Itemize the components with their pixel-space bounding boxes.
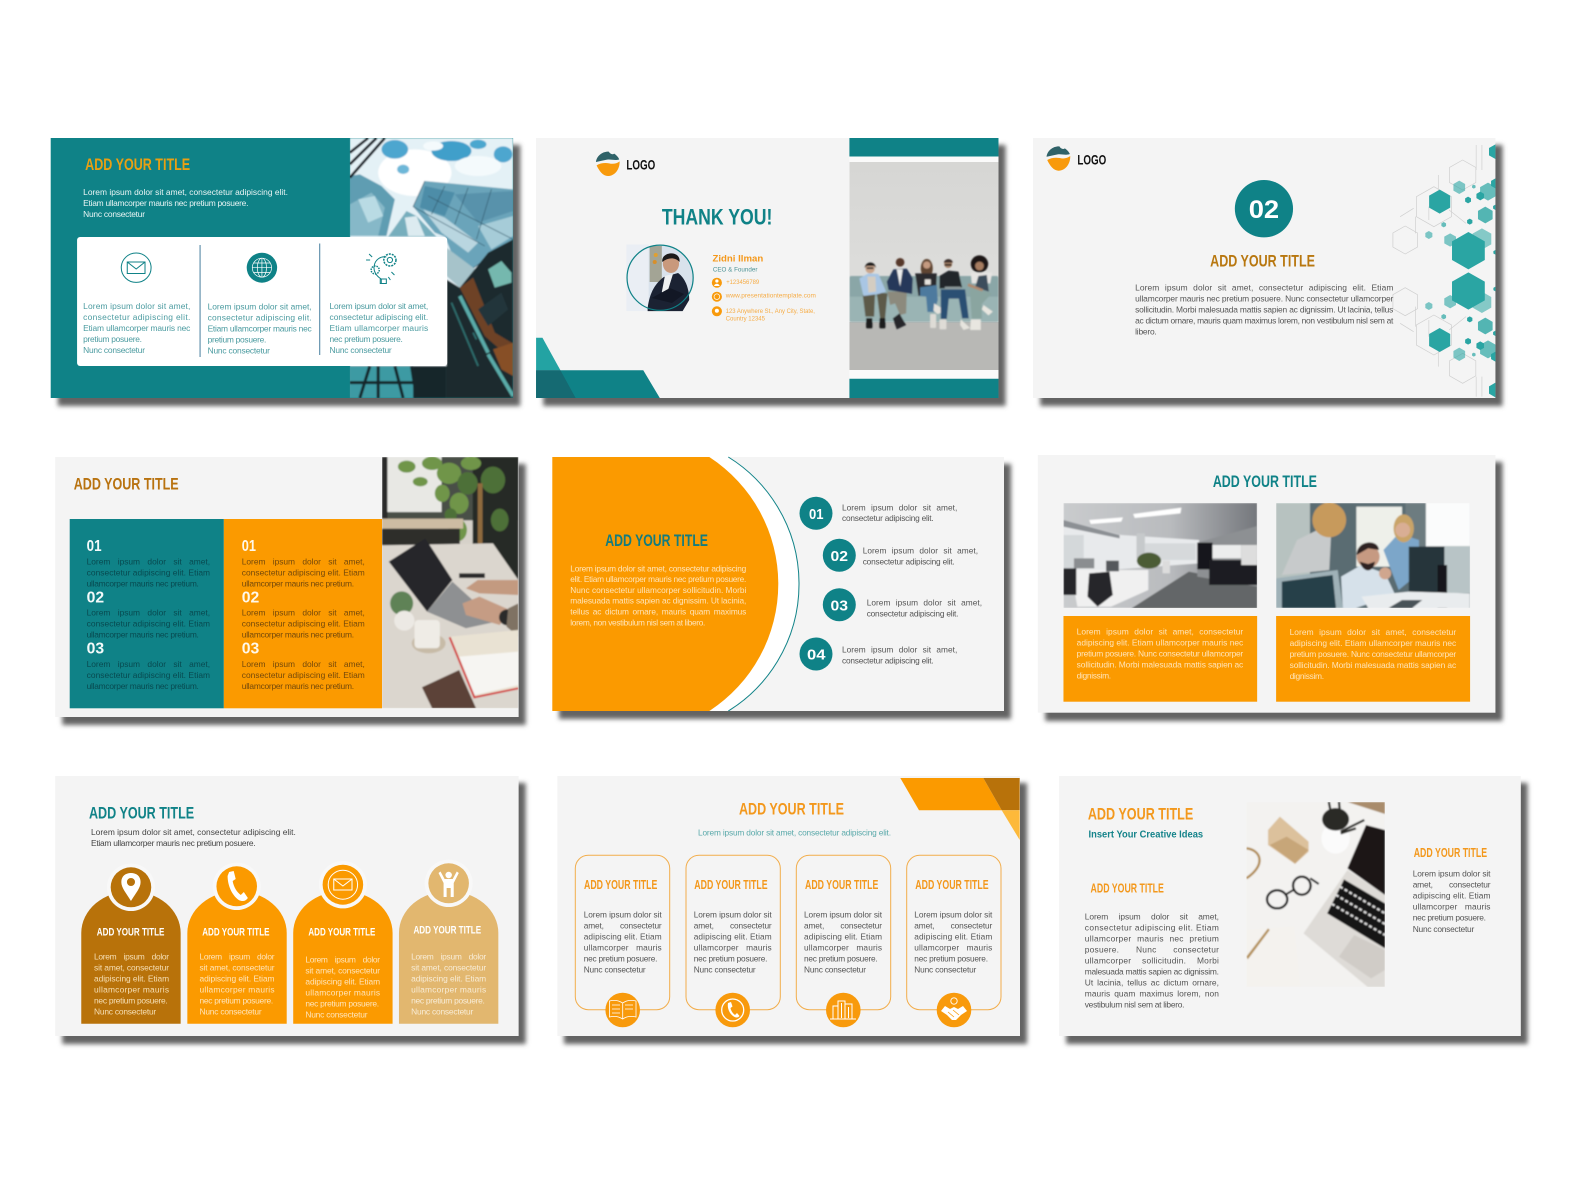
slide 3: section 02: [1033, 138, 1502, 398]
card 1: ADD YOUR TITLE: [584, 878, 657, 892]
intro text: [91, 827, 296, 848]
card 4: Nunc consectetur: [914, 964, 977, 974]
card 3: Nunc consectetur: [804, 964, 866, 974]
card 2: adipiscing elit. Etiam: [694, 931, 772, 941]
arch 1: location: [81, 864, 181, 1024]
icon: lightbulb with gears: [366, 254, 396, 284]
slide 7: four arches: [55, 776, 519, 1036]
paragraph: malesuada mattis sapien ac dignissim. Ut lacinia,: [570, 596, 746, 606]
heading: ADD YOUR TITLE: [74, 474, 179, 493]
right paragraph: [1413, 869, 1491, 934]
teal list: consectetur adipiscing elit. Etiam: [87, 670, 210, 680]
card 3: [796, 855, 891, 1027]
orange list: Lorem ipsum dolor sit amet,: [242, 556, 365, 566]
column 2 text: Etiam ullamcorper mauris nec: [208, 323, 312, 333]
orange list: 03: [242, 640, 259, 658]
caption 2: pretium posuere. Nunc consectetur ullamcorper: [1290, 649, 1456, 659]
corner shapes: [536, 338, 660, 398]
left paragraph: consectetur adipiscing elit. Etiam: [1085, 923, 1219, 933]
arch 1: location: sit amet, consectetur: [94, 962, 169, 972]
caption 2: [1276, 616, 1470, 702]
icon: globe: [247, 253, 277, 283]
teal list: consectetur adipiscing elit. Etiam: [87, 567, 210, 577]
orange list: 02: [242, 588, 259, 606]
subheading: Insert Your Creative Ideas: [1089, 829, 1203, 841]
arch 2: phone: [187, 863, 287, 1024]
paragraph: [1135, 283, 1394, 337]
arch 4: person: nec pretium posuere.: [411, 995, 485, 1005]
orange list: consectetur adipiscing elit. Etiam: [242, 619, 365, 629]
intro text: Etiam ullamcorper mauris nec pretium posuere.: [83, 198, 248, 208]
paragraph: tellus ac dictum ornare, mauris quam maximus: [570, 607, 746, 617]
column 1 text: consectetur adipiscing elit.: [83, 312, 190, 322]
caption 2: dignissim.: [1290, 671, 1324, 681]
orange list: 01: [242, 537, 256, 555]
right paragraph: nec pretium posuere.: [1413, 913, 1486, 923]
logo: LOGO: [626, 156, 655, 172]
teal list: ullamcorper mauris nec pretium.: [87, 578, 199, 588]
icon: handshake with globe: [937, 993, 971, 1027]
left paragraph: mauris quam maximus lorem, non: [1085, 989, 1219, 999]
paragraph: ac dictum ornare, mauris quam maximus lorem, non vestibulum nisl sem at: [1135, 316, 1394, 326]
photo: glass building: [350, 138, 514, 398]
left paragraph: Ut lacinia, tellus ac dictum ornare,: [1085, 978, 1219, 988]
photo: desk flat lay: [1246, 802, 1385, 987]
item 04: [800, 638, 957, 670]
card 2: Nunc consectetur: [694, 964, 756, 974]
white card with three columns: [77, 237, 447, 366]
teal bars: [849, 138, 998, 398]
intro text: Etiam ullamcorper mauris nec pretium posuere.: [91, 838, 256, 848]
heading: THANK YOU!: [662, 204, 772, 229]
item 04: 04: [807, 647, 826, 664]
item 03: 03: [830, 597, 848, 614]
logo: [1047, 146, 1106, 171]
item 02: consectetur adipiscing elit.: [863, 556, 955, 566]
icon: phone: [715, 993, 750, 1027]
card 4: adipiscing elit. Etiam: [914, 931, 992, 941]
item 01: 01: [809, 506, 824, 523]
arch 3: mail: Lorem ipsum dolor: [305, 954, 380, 964]
arch 3: mail: Nunc consectetur: [305, 1009, 368, 1019]
logo: LOGO: [1077, 151, 1106, 167]
orange list: consectetur adipiscing elit. Etiam: [242, 567, 365, 577]
paragraph: sollicitudin. Morbi malesuada mattis sapien ac dignissim. Ut lacinia, tellus: [1135, 305, 1393, 315]
arch 4: person: Nunc consectetur: [411, 1006, 474, 1016]
item 04: consectetur adipiscing elit.: [842, 655, 934, 665]
icon: open book: [605, 993, 640, 1027]
card 1: adipiscing elit. Etiam: [584, 931, 662, 941]
caption 1: adipiscing elit. Etiam ullamcorper mauris nec: [1077, 638, 1243, 648]
item 02: [823, 539, 978, 572]
card 1: Lorem ipsum dolor sit: [584, 909, 662, 919]
orange list: ullamcorper mauris nec pretium.: [242, 681, 354, 691]
card 3: ullamcorper mauris: [804, 942, 882, 952]
caption 1: [1063, 616, 1257, 702]
left paragraph: ullamcorper mauris nec pretium: [1085, 934, 1219, 944]
item 03: Lorem ipsum dolor sit amet,: [867, 598, 982, 608]
arch 3: mail: ADD YOUR TITLE: [308, 926, 375, 938]
icon: buildings: [826, 993, 861, 1027]
right paragraph: adipiscing elit. Etiam: [1413, 891, 1491, 901]
slide 9: photo with two text columns: [1059, 776, 1521, 1036]
caption 2: Lorem ipsum dolor sit amet, consectetur: [1290, 627, 1456, 637]
left paragraph: ullamcorper sollicitudin. Morbi: [1085, 956, 1219, 966]
icon: phone: [228, 871, 248, 901]
contact details: +123456789: [726, 279, 760, 286]
slide 1: services on teal: [51, 138, 513, 398]
paragraph: libero.: [1135, 327, 1157, 337]
column 2 text: Lorem ipsum dolor sit amet,: [208, 301, 312, 311]
caption 1: sollicitudin. Morbi malesuada mattis sapien ac: [1077, 660, 1243, 670]
arch 3: mail: ullamcorper mauris: [305, 987, 380, 997]
logo: [596, 152, 655, 176]
icon: person with raised arms: [439, 872, 459, 897]
paragraph: [570, 563, 747, 627]
arch 4: person: sit amet, consectetur: [411, 962, 486, 972]
icon: envelope: [121, 253, 151, 282]
card 4: Lorem ipsum dolor sit: [914, 909, 993, 919]
card 2: ullamcorper mauris: [694, 942, 772, 952]
orange panel: [552, 457, 778, 711]
teal list: [70, 519, 224, 708]
slide 8: four outlined cards: [557, 776, 1020, 1036]
heading: ADD YOUR TITLE: [605, 532, 708, 550]
icon: envelope: [328, 870, 358, 899]
arch 2: phone: sit amet, consectetur: [200, 962, 275, 972]
card 2: nec pretium posuere.: [694, 953, 767, 963]
heading: ADD YOUR TITLE: [85, 155, 190, 174]
column 2 text: pretium posuere.: [208, 334, 266, 344]
item 04: Lorem ipsum dolor sit amet,: [842, 645, 957, 655]
left paragraph: [1085, 912, 1219, 1010]
number badge: 02: [1249, 196, 1279, 224]
card 1: Nunc consectetur: [584, 964, 646, 974]
arch 1: location: nec pretium posuere.: [94, 995, 168, 1005]
column 3 text: Nunc consectetur: [330, 345, 392, 355]
orange list: consectetur adipiscing elit. Etiam: [242, 670, 365, 680]
card 1: amet, consectetur: [584, 920, 662, 930]
heading: ADD YOUR TITLE: [1088, 805, 1193, 824]
orange list: Lorem ipsum dolor sit amet,: [242, 608, 365, 618]
arch 4: person: [399, 860, 498, 1024]
arch 1: location: ADD YOUR TITLE: [97, 926, 164, 938]
intro text: [83, 187, 288, 219]
arch 3: mail: nec pretium posuere.: [305, 998, 379, 1008]
intro text: Nunc consectetur: [83, 209, 145, 219]
contact details: Country 12345: [726, 316, 765, 323]
card 2: ADD YOUR TITLE: [694, 878, 768, 892]
teal list: 01: [87, 537, 102, 555]
paragraph: elit. Etiam ullamcorper mauris nec pretium posuere.: [570, 574, 746, 584]
intro text: Lorem ipsum dolor sit amet, consectetur adipiscing elit.: [91, 827, 296, 837]
arch 3: mail: [293, 861, 393, 1024]
icon: map pin: [121, 873, 141, 901]
card 4: ullamcorper mauris: [914, 942, 992, 952]
right paragraph: Lorem ipsum dolor sit: [1413, 869, 1491, 879]
arch 1: location: adipiscing elit. Etiam: [94, 973, 169, 983]
column 1 text: Etiam ullamcorper mauris nec: [83, 323, 190, 333]
left paragraph: posuere. Nunc consectetur: [1085, 945, 1219, 955]
card 3: amet, consectetur: [804, 920, 882, 930]
slide 2: thank you: [536, 138, 998, 398]
hexagon network decoration: [1392, 144, 1496, 398]
arch 2: phone: adipiscing elit. Etiam: [200, 973, 275, 983]
card 2: [686, 855, 780, 1027]
intro text: Lorem ipsum dolor sit amet, consectetur adipiscing elit.: [83, 187, 288, 197]
arch 2: phone: Lorem ipsum dolor: [200, 951, 275, 961]
arch 4: person: ullamcorper mauris: [411, 984, 486, 994]
card 1: nec pretium posuere.: [584, 953, 657, 963]
column 2 text: consectetur adipiscing elit.: [208, 312, 312, 322]
white band and teal arc: [552, 457, 799, 711]
arch 2: phone: ADD YOUR TITLE: [202, 926, 269, 938]
column 1 text: Nunc consectetur: [83, 345, 145, 355]
right paragraph: amet, consectetur: [1413, 880, 1491, 890]
column 2 text: [208, 301, 312, 355]
column 3 text: [330, 301, 428, 355]
teal list: consectetur adipiscing elit. Etiam: [87, 619, 210, 629]
number badge: [1235, 180, 1293, 237]
caption 1: Lorem ipsum dolor sit amet, consectetur: [1077, 627, 1243, 637]
card 4: ADD YOUR TITLE: [915, 878, 989, 892]
card 3: Lorem ipsum dolor sit: [804, 909, 883, 919]
arch 1: location: ullamcorper mauris: [94, 984, 169, 994]
right title: ADD YOUR TITLE: [1414, 846, 1487, 860]
item 02: 02: [830, 548, 848, 565]
caption 2: adipiscing elit. Etiam ullamcorper mauris nec: [1290, 638, 1456, 648]
arch 3: mail: adipiscing elit. Etiam: [305, 976, 380, 986]
column 3 text: Etiam ullamcorper mauris: [330, 323, 428, 333]
orange list: Lorem ipsum dolor sit amet,: [242, 659, 365, 669]
role: CEO & Founder: [713, 267, 758, 274]
column 1 text: [83, 301, 190, 355]
photo: open office: [1064, 503, 1258, 608]
card 2: Lorem ipsum dolor sit: [694, 909, 772, 919]
slide 6: two photos with captions: [1038, 455, 1495, 713]
arch 4: person: Lorem ipsum dolor: [411, 951, 486, 961]
slide 5: orange arc with four items: [552, 457, 1004, 711]
arch 2: phone: Nunc consectetur: [200, 1006, 262, 1016]
paragraph: Lorem ipsum dolor sit amet, consectetur adipiscing elit. Etiam: [1135, 283, 1393, 293]
subtitle: Lorem ipsum dolor sit amet, consectetur adipiscing elit.: [698, 827, 891, 837]
right paragraph: ullamcorper mauris: [1413, 902, 1490, 912]
paragraph: lorem, non vestibulum nisl sem at libero.: [570, 617, 705, 627]
arch 4: person: adipiscing elit. Etiam: [411, 973, 486, 983]
teal list: Lorem ipsum dolor sit amet,: [87, 556, 210, 566]
card 3: ADD YOUR TITLE: [805, 878, 878, 892]
caption 1: dignissim.: [1077, 671, 1111, 681]
column 1 text: pretium posuere.: [83, 334, 142, 344]
teal list: Lorem ipsum dolor sit amet,: [87, 659, 210, 669]
item 02: Lorem ipsum dolor sit amet,: [863, 545, 978, 555]
right paragraph: Nunc consectetur: [1413, 924, 1474, 934]
teal list: ullamcorper mauris nec pretium.: [87, 630, 199, 640]
column 1 text: Lorem ipsum dolor sit amet,: [83, 301, 190, 311]
heading: ADD YOUR TITLE: [739, 800, 844, 818]
arch 2: phone: nec pretium posuere.: [200, 995, 273, 1005]
card 1: [575, 855, 670, 1027]
left paragraph: malesuada mattis sapien ac dignissim.: [1085, 967, 1219, 977]
heading: ADD YOUR TITLE: [1210, 252, 1315, 271]
orange list: ullamcorper mauris nec pretium.: [242, 578, 354, 588]
contact details: 123 Anywhere St., Any City, State,: [726, 308, 815, 315]
contact details: www.presentationtemplate.com: [725, 292, 816, 299]
left paragraph: Lorem ipsum dolor sit amet,: [1085, 912, 1219, 922]
photo: team on a sofa: [850, 162, 998, 370]
caption 2: sollicitudin. Morbi malesuada mattis sapien ac: [1290, 660, 1456, 670]
item 01: consectetur adipiscing elit.: [842, 513, 934, 523]
contact name: Zidni Ilman: [713, 254, 763, 265]
card 4: amet, consectetur: [914, 920, 993, 930]
card 3: nec pretium posuere.: [804, 953, 878, 963]
arch 2: phone: ullamcorper mauris: [200, 984, 275, 994]
paragraph: ullamcorper mauris nec pretium posuere. Nunc consectetur ullamcorper: [1135, 294, 1394, 304]
caption 1: pretium posuere. Nunc consectetur ullamcorper: [1077, 649, 1243, 659]
card 2: amet, consectetur: [694, 920, 772, 930]
teal list: ullamcorper mauris nec pretium.: [87, 681, 199, 691]
item 01: Lorem ipsum dolor sit amet,: [842, 502, 957, 512]
slide 4: two numbered lists: [55, 457, 519, 717]
column 3 text: Lorem ipsum dolor sit amet,: [330, 301, 428, 311]
card 1: ullamcorper mauris: [584, 942, 662, 952]
column 2 text: Nunc consectetur: [208, 345, 270, 355]
corner shapes: [900, 778, 1020, 840]
arch 4: person: ADD YOUR TITLE: [413, 924, 481, 936]
heading: ADD YOUR TITLE: [1213, 472, 1317, 491]
orange list: [224, 519, 382, 708]
paragraph: Nunc consectetur ullamcorper sollicitudin. Morbi: [570, 585, 746, 595]
column 3 text: nec pretium posuere.: [330, 334, 403, 344]
card 4: [907, 855, 1001, 1027]
contact details: [712, 278, 816, 323]
orange list: ullamcorper mauris nec pretium.: [242, 630, 354, 640]
teal list: 03: [87, 640, 104, 658]
left paragraph: vestibulum nisl sem at libero.: [1085, 1000, 1184, 1010]
photo: colleagues at a monitor: [1276, 503, 1470, 608]
heading: ADD YOUR TITLE: [89, 803, 194, 822]
item 03: [823, 588, 982, 621]
photo: laptop on desk: [382, 457, 518, 708]
column 3 text: consectetur adipiscing elit.: [330, 312, 428, 322]
card 3: adipiscing elit. Etiam: [804, 931, 882, 941]
arch 1: location: Lorem ipsum dolor: [94, 951, 169, 961]
paragraph: Lorem ipsum dolor sit amet, consectetur adipiscing: [570, 563, 747, 573]
item 01: [800, 497, 957, 530]
left title: ADD YOUR TITLE: [1091, 881, 1164, 895]
teal list: 02: [87, 588, 104, 606]
teal list: Lorem ipsum dolor sit amet,: [87, 608, 210, 618]
item 03: consectetur adipiscing elit.: [867, 608, 958, 618]
arch 1: location: Nunc consectetur: [94, 1006, 156, 1016]
card 4: nec pretium posuere.: [914, 953, 988, 963]
portrait: [626, 244, 694, 314]
arch 3: mail: sit amet, consectetur: [305, 965, 380, 975]
